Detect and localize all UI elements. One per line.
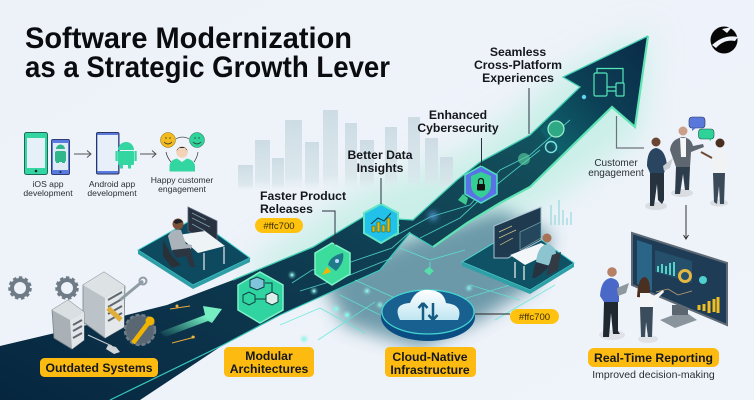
leader: seamless: [528, 88, 530, 134]
glow around arrow: [240, 30, 650, 290]
main growth band and arrow: [0, 36, 648, 400]
label: faster product releases: Faster Product: [260, 189, 346, 203]
label: Cloud-Native Infrastructure: Cloud-Native: [392, 350, 468, 364]
speech bubbles: [689, 117, 714, 141]
label: seamless cross-platform: Experiences: [482, 71, 554, 85]
teal circuit floor: [320, 210, 552, 348]
icon: outdated servers: [52, 272, 125, 354]
label: enhanced cybersecurity: Enhanced: [429, 108, 487, 122]
hexagon: data insights: [364, 204, 398, 243]
label: faster product releases: Releases: [260, 202, 313, 216]
city skyline: [238, 110, 453, 190]
label: Cloud-Native Infrastructure: Infrastructure: [390, 363, 470, 377]
text: iOS app development: development: [23, 188, 73, 198]
icon: cloud infrastructure disc: [381, 290, 475, 341]
icon: iOS phones: [24, 132, 70, 174]
label: Modular Architectures: Architectures: [230, 362, 309, 376]
icon: android phone: [96, 132, 137, 174]
arrow green edges: [433, 36, 648, 247]
label: seamless cross-platform: Seamless: [490, 45, 546, 59]
icon: gear middle: [56, 278, 78, 298]
label: Outdated Systems: Outdated Systems: [45, 361, 153, 375]
tag: #ffc700 lower: #ffc700: [519, 312, 550, 323]
icon: wrench and gear: [108, 278, 155, 345]
tag: #ffc700 upper: #ffc700: [263, 221, 295, 232]
hexagon: rocket: [315, 243, 350, 285]
people: reporting pair: [599, 267, 664, 343]
text: customer engagement: engagement: [588, 168, 644, 179]
connector: arrow to customer engagement: [616, 116, 644, 148]
circuit traces: [280, 120, 570, 340]
people: customer engagement group: [645, 117, 729, 210]
circuit glow dots: [290, 267, 472, 342]
tag: #ffc700 upper: [255, 218, 303, 233]
bar chart hologram: [551, 200, 571, 225]
text: Happy customer engagement: engagement: [158, 184, 206, 194]
label: Modular Architectures: [224, 347, 314, 377]
arrow: ios to android: [74, 150, 91, 158]
text: improved decision-making: Improved decision-making: [592, 369, 715, 381]
icon: logo: [710, 26, 738, 54]
text: Android app development: Android app: [89, 179, 135, 189]
icon: happy customer: [160, 132, 204, 172]
arrow: people to dashboard: [684, 205, 688, 239]
text: Happy customer engagement: Happy customer: [151, 175, 213, 185]
text: customer engagement: Customer: [594, 158, 638, 169]
tag: #ffc700 lower: [475, 309, 559, 324]
label: Modular Architectures: Modular: [245, 349, 293, 363]
icon: devices on arrow head: [594, 68, 624, 96]
title: as a Strategic Growth Lever: [25, 51, 390, 84]
label: seamless cross-platform: Cross-Platform: [474, 58, 562, 72]
leader: data insights: [380, 178, 382, 204]
glowing nodes on shaft: [428, 95, 586, 220]
platform: developer right: [462, 207, 574, 294]
text: Android app development: development: [87, 188, 137, 198]
dashboard monitor: [632, 233, 727, 328]
text: iOS app development: iOS app: [32, 179, 64, 189]
label: better data insights: Insights: [357, 161, 404, 175]
icon: green arrow toward modular: [160, 304, 222, 343]
label: enhanced cybersecurity: Cybersecurity: [417, 121, 499, 135]
arrow: android to customer: [140, 150, 156, 158]
leader: cybersecurity: [480, 138, 482, 166]
title: Software Modernization: [25, 22, 352, 55]
label: Real-Time Reporting: [588, 348, 719, 367]
label: Outdated Systems: [40, 358, 158, 377]
hexagon: cybersecurity: [465, 166, 497, 203]
label: Real-Time Reporting: Real-Time Reporting: [594, 351, 713, 365]
platform: developer left: [138, 207, 250, 289]
label: better data insights: Better Data: [347, 148, 413, 162]
label: Cloud-Native Infrastructure: [385, 347, 476, 377]
icon: gear left: [10, 278, 30, 298]
hexagon: modular: [238, 272, 283, 323]
leader: faster product: [322, 211, 335, 245]
